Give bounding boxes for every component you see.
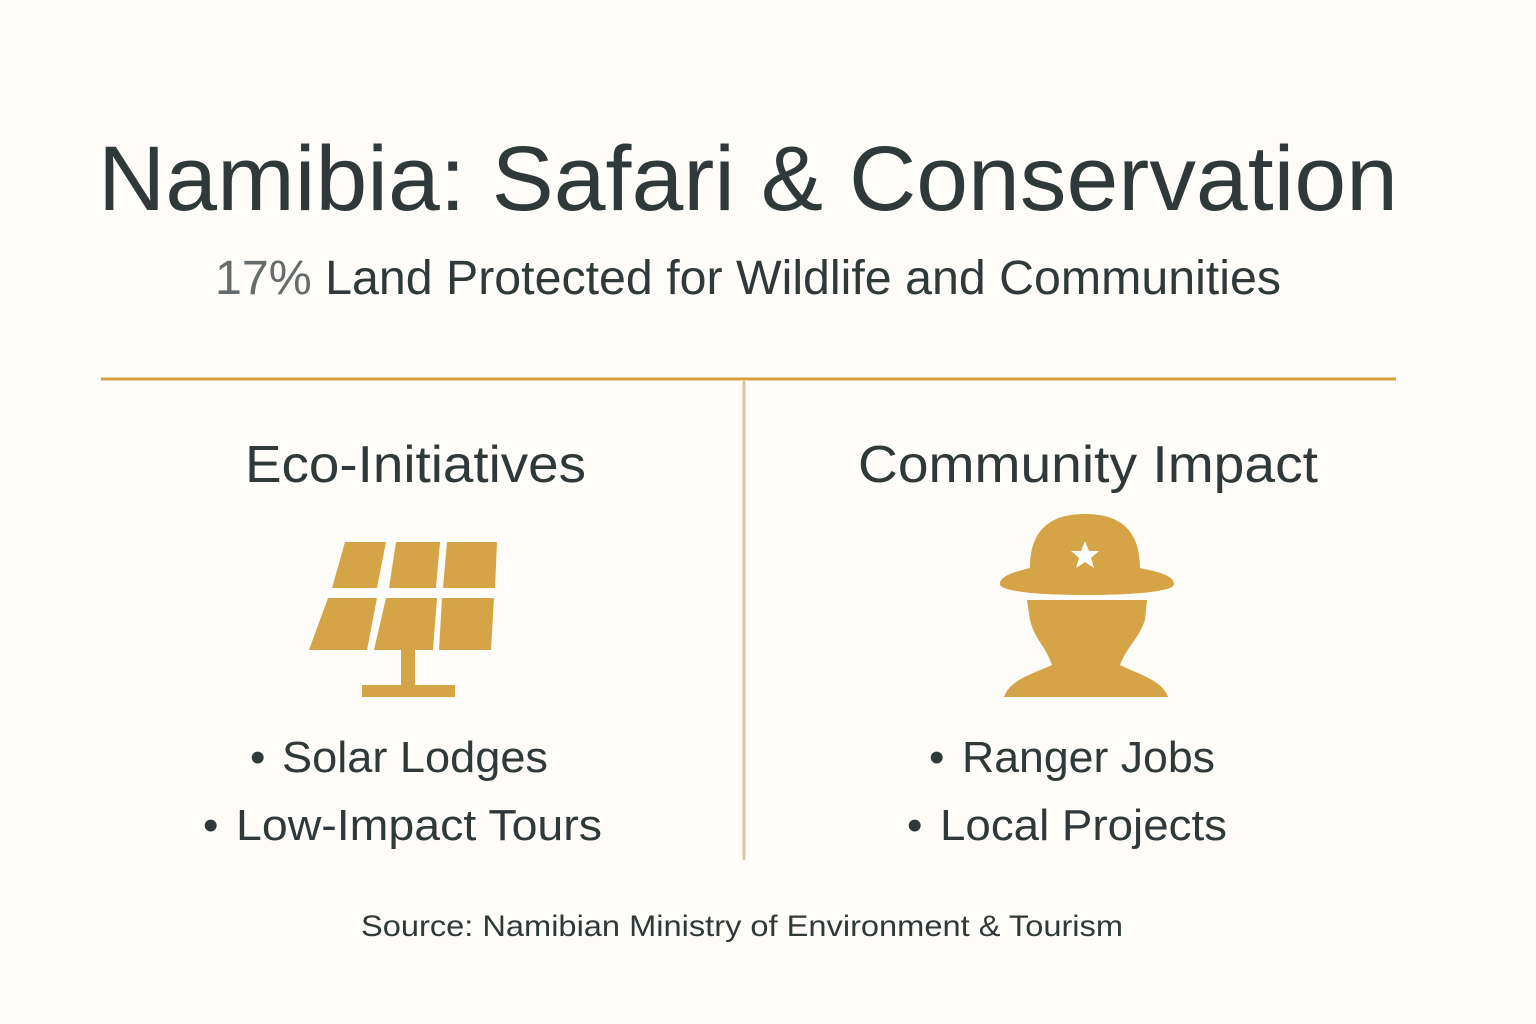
heading: Eco-Initiatives: Eco-Initiatives	[245, 436, 586, 494]
panel: community impact	[858, 436, 1319, 850]
bullet list: community: Ranger Jobs	[962, 733, 1215, 782]
bullet list: eco: Low-Impact Tours	[236, 801, 602, 850]
heading: Community Impact: Community Impact	[858, 436, 1319, 494]
bullet list: community	[907, 733, 1227, 850]
bullet list: eco: •	[250, 733, 265, 782]
icon: ranger	[1000, 514, 1174, 697]
bullet list: eco: Solar Lodges	[282, 733, 548, 782]
bullet list: community: •	[929, 733, 944, 782]
bullet list: eco	[203, 733, 602, 850]
bullet list: community: •	[907, 801, 922, 850]
icon: solar panel	[309, 542, 497, 697]
title: Namibia: Safari & Conservation	[98, 128, 1398, 230]
bullet list: eco: •	[203, 801, 218, 850]
bullet list: community: Local Projects	[940, 801, 1227, 850]
subtitle: 17% Land Protected for Wildlife and Communities	[215, 252, 1281, 305]
source note: Source: Namibian Ministry of Environment & Tourism	[361, 910, 1123, 943]
panel: eco-initiatives	[203, 436, 602, 850]
